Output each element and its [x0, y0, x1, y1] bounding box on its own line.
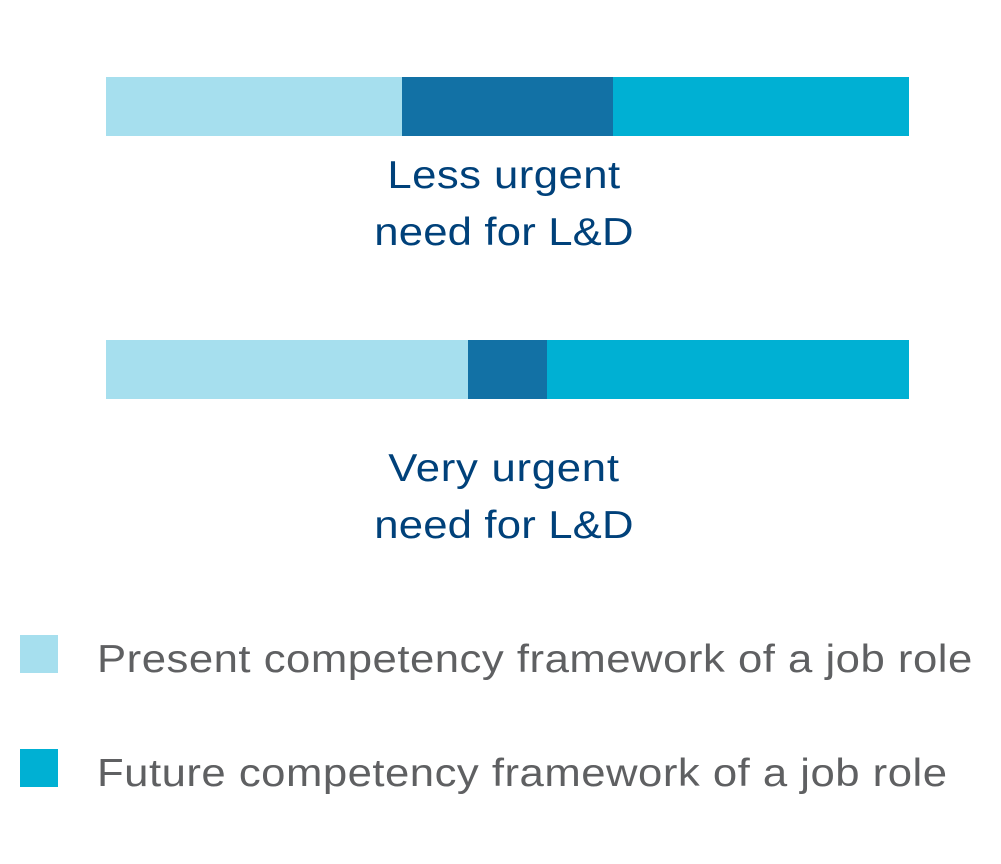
legend: future competency framework: Future competency framework of a job role [97, 752, 948, 795]
label: less urgent need for L&D [374, 154, 634, 254]
bar: very urgent need [106, 340, 909, 399]
label: very urgent need for L&D [374, 447, 634, 547]
label: very urgent need for L&D: need for L&D [374, 504, 634, 547]
label: less urgent need for L&D: Less urgent [387, 154, 621, 197]
label: very urgent need for L&D: Very urgent [388, 447, 620, 490]
bar: less urgent need [106, 77, 909, 136]
label: less urgent need for L&D: need for L&D [374, 211, 634, 254]
legend: present competency framework: Present competency framework of a job role [97, 638, 973, 681]
